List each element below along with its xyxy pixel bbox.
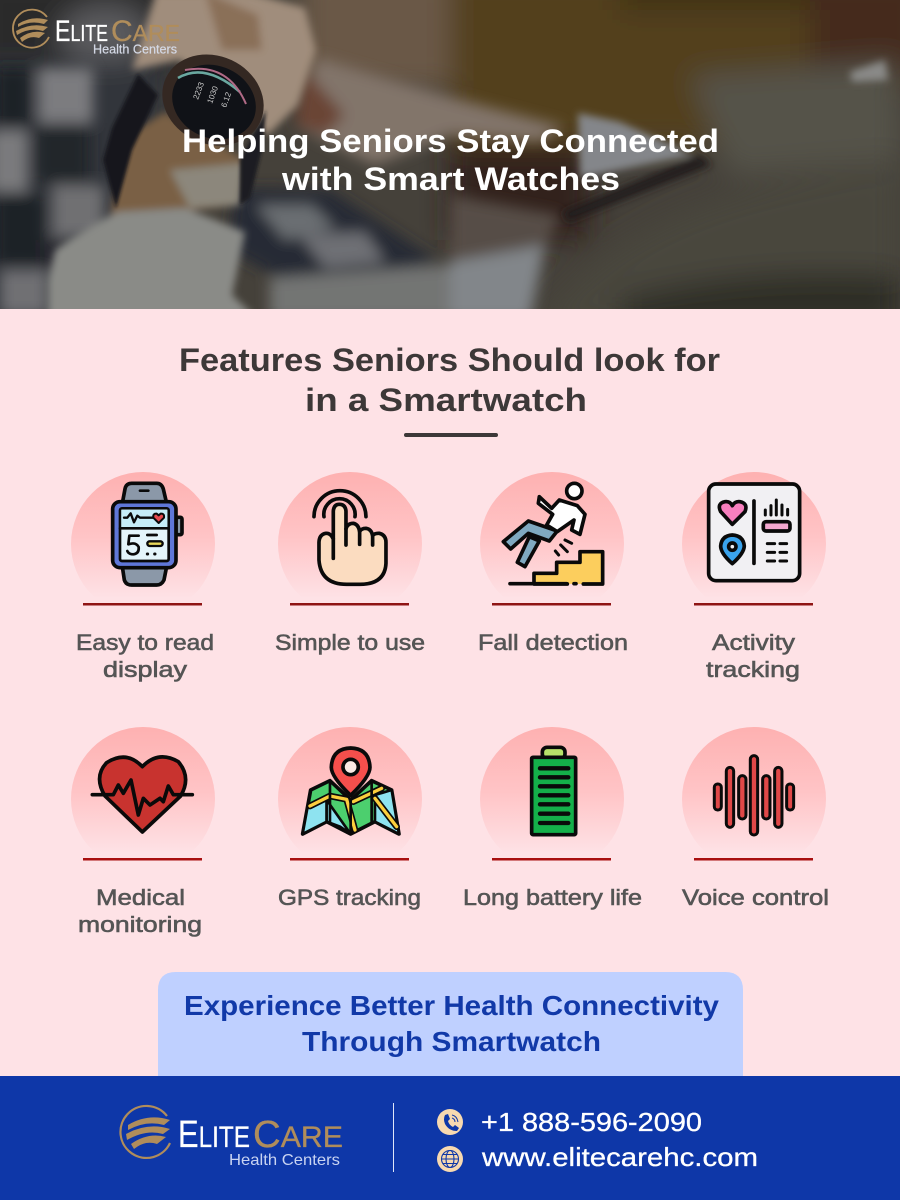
hero title: Helping Seniors Stay Connected xyxy=(182,123,719,159)
hero photo: wrist with smartwatch: 2233 xyxy=(191,80,206,101)
footer logo: ELITE xyxy=(178,1114,250,1156)
icon: battery xyxy=(532,747,576,835)
hero title: with Smart Watches xyxy=(281,161,620,197)
section heading: Features Seniors Should look for xyxy=(179,342,720,378)
footer logo: Health Centers xyxy=(229,1152,340,1169)
footer logo xyxy=(120,1106,343,1169)
feature: simple to use xyxy=(275,472,425,655)
label: Activity xyxy=(712,630,796,655)
label: Voice control xyxy=(682,885,829,910)
top logo: ELITE xyxy=(55,15,108,48)
footer logo: CARE xyxy=(253,1114,343,1156)
feature: voice control xyxy=(682,727,829,910)
hero photo: wrist with smartwatch: 1030 xyxy=(205,84,220,105)
label: Fall detection xyxy=(478,630,628,655)
feature: long battery life xyxy=(463,727,642,910)
phone number: +1 888-596-2090 xyxy=(481,1107,702,1137)
icon: smartwatch xyxy=(113,483,182,585)
call to action panel: Through Smartwatch xyxy=(302,1026,601,1057)
label: Medical xyxy=(96,885,185,910)
call to action panel xyxy=(158,972,743,1078)
icon: map with pin xyxy=(303,748,399,834)
label: Simple to use xyxy=(275,630,425,655)
label: display xyxy=(103,657,188,682)
footer band xyxy=(0,1076,900,1200)
top logo xyxy=(13,10,180,56)
icon: globe xyxy=(437,1146,463,1172)
website: www.elitecarehc.com xyxy=(481,1142,758,1172)
section heading: in a Smartwatch xyxy=(305,382,587,418)
label: GPS tracking xyxy=(278,885,421,910)
hero photo: wrist with smartwatch xyxy=(0,0,900,330)
label: Long battery life xyxy=(463,885,642,910)
label xyxy=(76,630,214,682)
watch strap and case xyxy=(103,74,266,208)
hero photo: wrist with smartwatch: 6.12 xyxy=(219,90,233,109)
icon: phone xyxy=(437,1109,463,1135)
top logo: Health Centers xyxy=(93,42,177,56)
icon: activity dashboard xyxy=(709,484,800,581)
icon: heart with pulse xyxy=(92,757,192,832)
label xyxy=(706,630,800,682)
label xyxy=(78,885,202,937)
feature: GPS tracking xyxy=(278,727,422,910)
top logo: CARE xyxy=(111,15,180,48)
label: tracking xyxy=(706,657,800,682)
feature: activity tracking xyxy=(682,472,826,682)
feature: fall detection xyxy=(478,472,628,655)
icon: tapping hand xyxy=(314,491,386,584)
icon: person falling on stairs xyxy=(503,483,603,584)
hero title xyxy=(182,123,719,197)
feature: medical monitoring xyxy=(71,727,215,937)
section heading xyxy=(179,342,720,437)
label: Easy to read xyxy=(76,630,214,655)
icon: sound wave xyxy=(714,756,794,835)
feature: easy to read display xyxy=(71,472,215,682)
label: monitoring xyxy=(78,912,202,937)
call to action panel: Experience Better Health Connectivity xyxy=(184,990,719,1021)
